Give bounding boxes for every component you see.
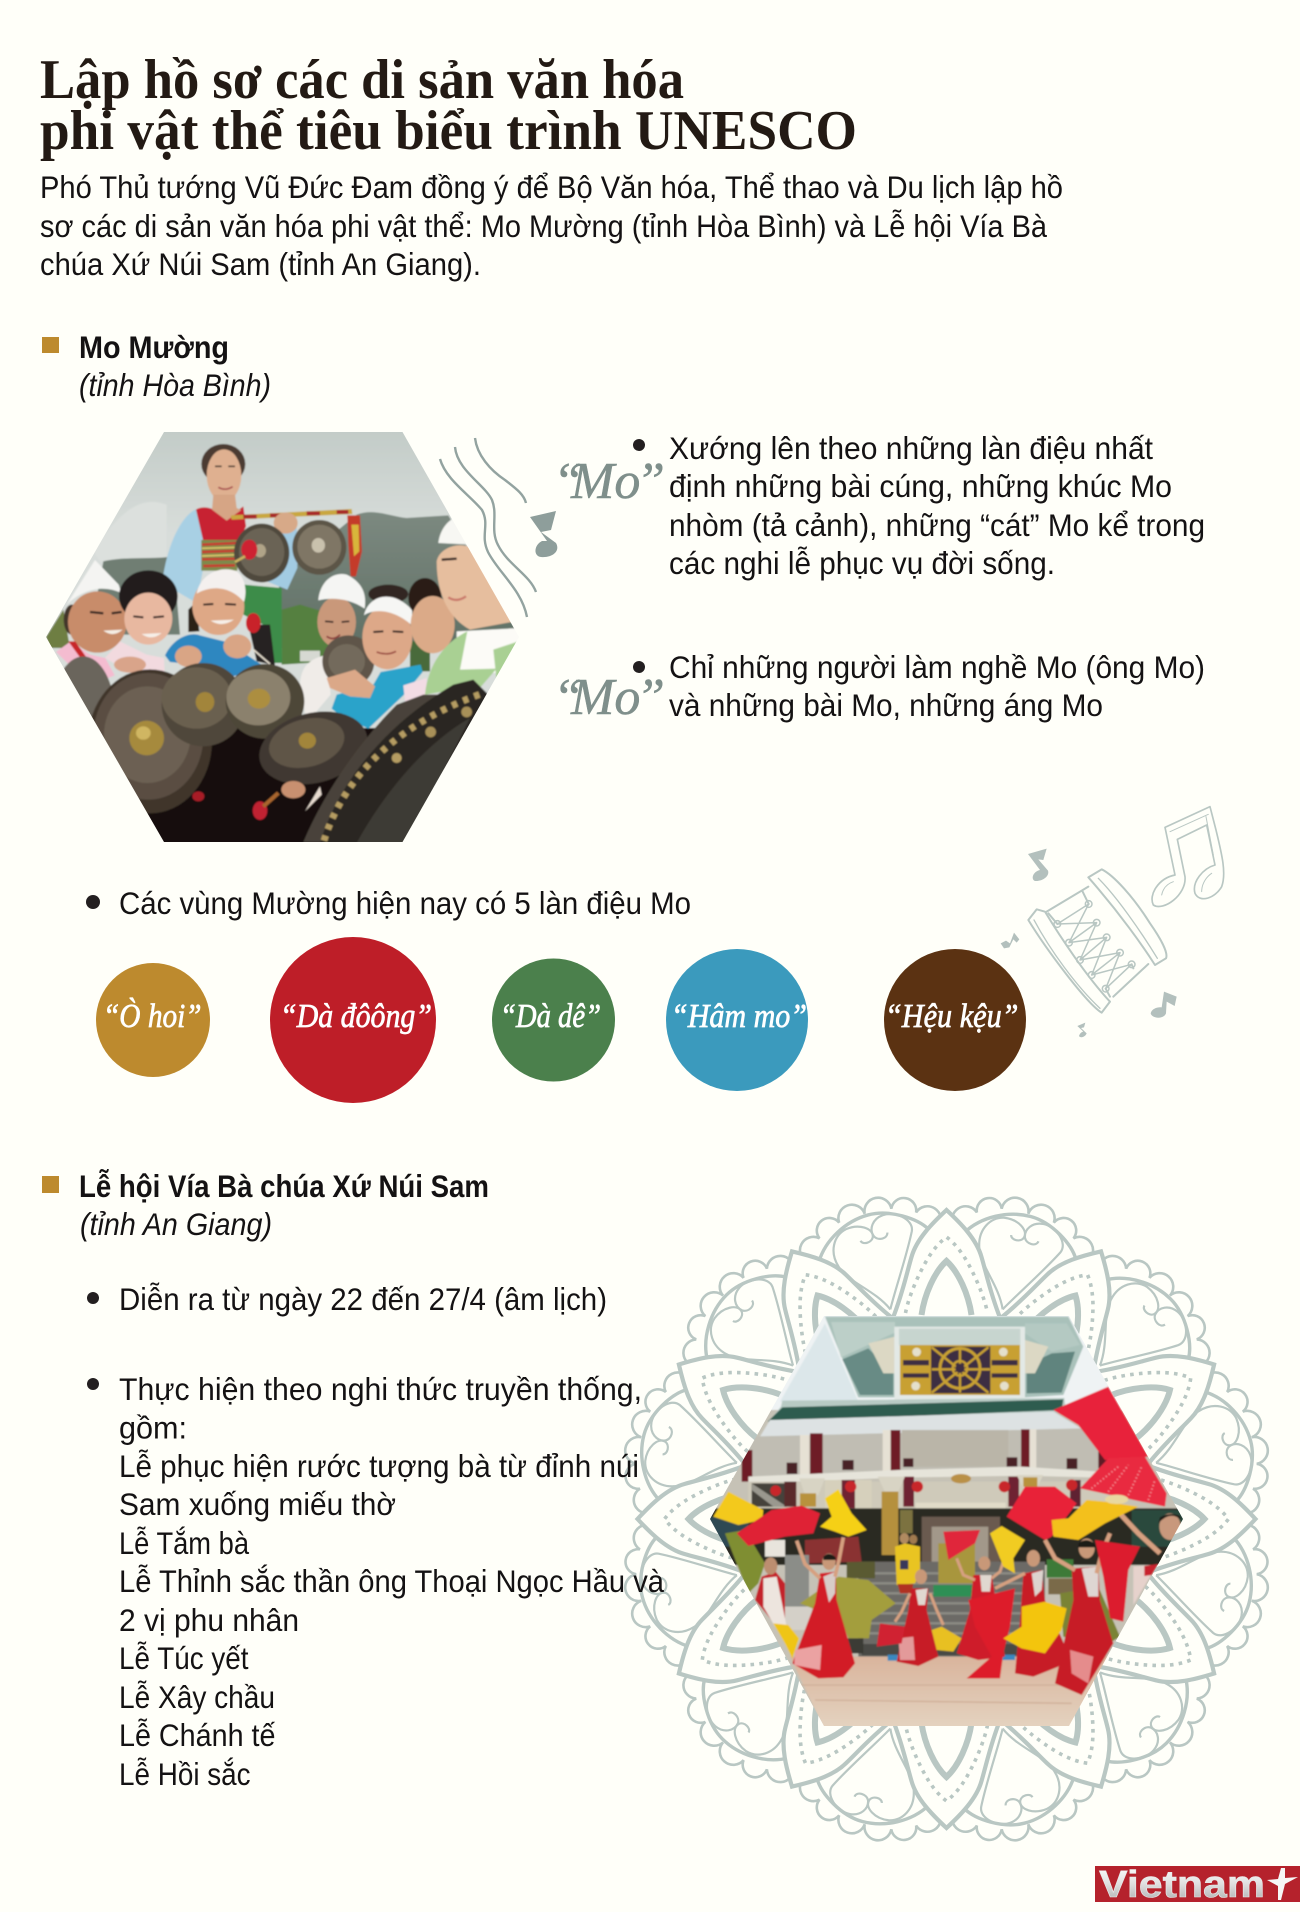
- girl with white hat: [300, 655, 331, 723]
- stairs, ground and plants: [858, 1562, 1045, 1657]
- lower gongs: [64, 656, 112, 718]
- circle: Hệu kệu: [884, 949, 1026, 1091]
- girl at right edge: [1159, 1513, 1181, 1540]
- title: [40, 49, 857, 162]
- definition 2: Mo as practitioner: “: [553, 669, 582, 726]
- definition 2: Mo as practitioner: Chỉ những người làm nghề Mo (ông Mo): [669, 649, 1205, 685]
- text: list of rituals: Lễ Hồi sắc: [119, 1756, 251, 1792]
- definition 2: Mo as practitioner: và những bài Mo, những áng Mo: [669, 687, 1103, 723]
- dancer 1: [792, 1572, 855, 1678]
- girl behind, right: [408, 578, 442, 612]
- definition 2: Mo as practitioner: Mo: [570, 669, 640, 726]
- definition 1: Mo as chant: nhòm (tả cảnh), những “cát” Mo kể trong: [669, 507, 1205, 543]
- silk fans: [713, 1492, 763, 1525]
- intro text: sơ các di sản văn hóa phi vật thể: Mo Mường (tỉnh Hòa Bình) và Lễ hội Vía Bà: [40, 208, 1047, 244]
- text: list of rituals: 2 vị phu nhân: [119, 1602, 299, 1638]
- text: list of rituals: Lễ Xây chầu: [119, 1679, 275, 1715]
- intro text: Phó Thủ tướng Vũ Đức Đam đồng ý để Bộ Văn hóa, Thể thao và Du lịch lập hồ: [40, 169, 1063, 205]
- large smiling girl: [438, 519, 466, 546]
- heading: Lễ hội Vía Bà chúa Xứ Núi Sam: Lễ hội Vía Bà chúa Xứ Núi Sam: [79, 1168, 489, 1204]
- text: list of rituals: Lễ Túc yết: [119, 1640, 249, 1676]
- circle: Dà dê: “Dà dê”: [500, 998, 601, 1035]
- title: phi vật thể tiêu biểu trình UNESCO: [40, 100, 857, 162]
- heading: Lễ hội Vía Bà chúa Xứ Núi Sam: [42, 1168, 489, 1242]
- definition 1: Mo as chant: định những bài cúng, những khúc Mo: [669, 468, 1172, 504]
- definition 1: Mo as chant: Xướng lên theo những làn điệu nhất: [669, 430, 1153, 466]
- standing woman with gongs: [162, 509, 204, 601]
- text: list of rituals: Lễ Thỉnh sắc thần ông Thoại Ngọc Hầu và: [119, 1563, 664, 1599]
- circle: Ò hoi: “Ò hoi”: [103, 997, 202, 1035]
- second woman: [105, 641, 165, 673]
- text: list of rituals: Sam xuống miếu thờ: [119, 1486, 396, 1522]
- dancer 2: [897, 1588, 938, 1666]
- circle: Ò hoi: [96, 963, 210, 1077]
- text: list of rituals: gồm:: [119, 1410, 187, 1446]
- definition 1: Mo as chant: ”: [636, 453, 665, 510]
- heading: Mo Mường: (tỉnh Hòa Bình): [79, 367, 271, 403]
- definition 1: Mo as chant: các nghi lễ phục vụ đời sống.: [669, 545, 1055, 581]
- circle: Hâm mo: [666, 949, 808, 1091]
- icon: small music notes: [1001, 849, 1177, 1037]
- text: list of rituals: Lễ phục hiện rước tượng bà từ đỉnh núi: [119, 1448, 639, 1484]
- heading: Mo Mường: [42, 329, 271, 403]
- text: list of rituals: Lễ Chánh tế: [119, 1717, 276, 1753]
- sound waves: [440, 438, 536, 617]
- dancer 5: [1055, 1567, 1113, 1695]
- heading: Lễ hội Vía Bà chúa Xứ Núi Sam: (tỉnh An Giang): [80, 1206, 272, 1242]
- upper roof: [825, 1317, 1083, 1397]
- circle: Hệu kệu: “Hệu kệu”: [885, 998, 1018, 1035]
- text: list of rituals: Lễ Tắm bà: [119, 1525, 249, 1561]
- room below beam: [748, 1481, 1106, 1508]
- girl in blue with headband: [165, 634, 263, 681]
- definition 1: Mo as chant: Mo: [570, 453, 640, 510]
- photo: temple festival dancers in hexagon: [705, 1310, 1192, 1730]
- photo: Muong gong performers in hexagon: [40, 428, 527, 848]
- circle: Dà đôông: “Dà đôông”: [280, 998, 432, 1035]
- definition 1: Mo as chant: [553, 430, 1205, 581]
- circle: Dà dê: [492, 958, 615, 1082]
- circle: Hâm mo: “Hâm mo”: [671, 998, 807, 1035]
- icon: music note: [530, 511, 557, 557]
- definition 2: Mo as practitioner: ”: [636, 669, 665, 726]
- text: festival date: Diễn ra từ ngày 22 đến 27/4 (âm lịch): [119, 1281, 607, 1317]
- man at left and yellow-robed figures: [755, 1572, 785, 1627]
- icon: drum and music notes: [1028, 807, 1224, 1013]
- definition 2: Mo as practitioner: [553, 649, 1205, 726]
- girl with white headband, blue shirt: [332, 665, 423, 729]
- intro text: [40, 169, 1063, 282]
- circle: Dà đôông: [270, 937, 436, 1103]
- lower roof with tiles: [778, 1398, 1066, 1413]
- large drum: [303, 695, 440, 842]
- woman far left in white cap: [56, 642, 114, 678]
- text: list of rituals: Thực hiện theo nghi thức truyền thống,: [119, 1371, 642, 1407]
- text: list of rituals: [87, 1371, 664, 1792]
- veranda: [767, 1436, 771, 1437]
- title: Lập hồ sơ các di sản văn hóa: [40, 49, 684, 111]
- heading: Mo Mường: Mo Mường: [79, 329, 229, 365]
- mandala ornament: [610, 1183, 1283, 1855]
- intro text: chúa Xứ Núi Sam (tỉnh An Giang).: [40, 246, 481, 282]
- five Mo tunes lead-in: Các vùng Mường hiện nay có 5 làn điệu Mo: [119, 885, 691, 921]
- logo: Vietnam+: Vietnam: [1099, 1864, 1265, 1906]
- dancer 4: [1015, 1570, 1067, 1677]
- definition 1: Mo as chant: “: [553, 453, 582, 510]
- dancer 3: [957, 1575, 1005, 1660]
